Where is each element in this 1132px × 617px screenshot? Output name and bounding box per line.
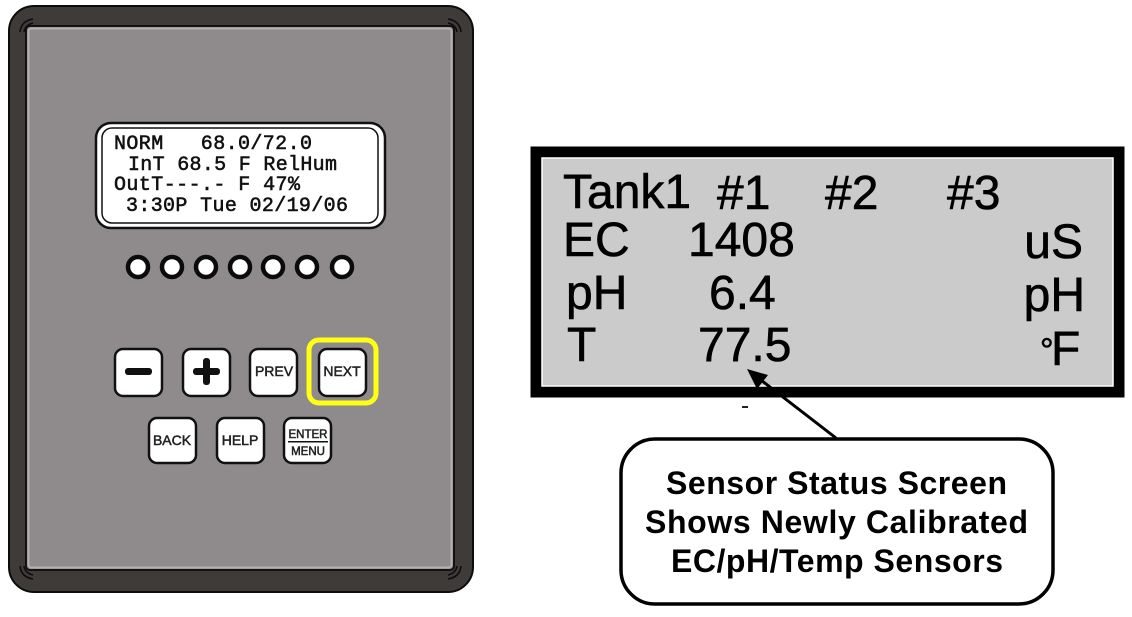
front panel bbox=[26, 26, 454, 570]
LCD display: 3:30P Tue 02/19/06 bbox=[126, 195, 348, 218]
sensor status screen: EC bbox=[563, 214, 630, 267]
callout: EC/pH/Temp Sensors bbox=[671, 543, 1003, 579]
callout bbox=[621, 439, 1053, 604]
LCD display: InT 68.5 F RelHum bbox=[128, 154, 337, 177]
help button bbox=[217, 418, 264, 463]
small dash mark bbox=[742, 406, 748, 408]
arrow to temperature reading bbox=[747, 369, 836, 438]
sensor status screen: Tank1 bbox=[563, 166, 691, 219]
prev button bbox=[250, 349, 297, 396]
panel highlight bbox=[28, 28, 452, 568]
sensor status screen: ° bbox=[1040, 332, 1054, 370]
prev button: PREV bbox=[255, 363, 294, 379]
indicator LEDs bbox=[128, 257, 352, 277]
help button: HELP bbox=[222, 432, 258, 448]
LCD display: NORM 68.0/72.0 bbox=[114, 133, 312, 156]
sensor status screen: 77.5 bbox=[698, 319, 791, 372]
sensor status screen: #1 bbox=[717, 167, 770, 220]
sensor status screen: 6.4 bbox=[709, 267, 776, 320]
plus button bbox=[183, 349, 230, 396]
LCD display: OutT---.- F 47% bbox=[114, 174, 301, 197]
sensor status screen: F bbox=[1051, 323, 1080, 376]
sensor status screen bbox=[536, 152, 1119, 392]
sensor status screen: 1408 bbox=[688, 214, 795, 267]
sensor status screen: T bbox=[567, 319, 596, 372]
next button highlighted bbox=[309, 340, 376, 403]
next button highlighted: NEXT bbox=[323, 363, 361, 379]
sensor status screen: #2 bbox=[825, 167, 878, 220]
LCD display bbox=[96, 123, 385, 228]
enter menu button: MENU bbox=[291, 446, 325, 458]
minus button bbox=[115, 349, 162, 396]
back button: BACK bbox=[153, 432, 192, 448]
back button bbox=[149, 418, 196, 463]
housing corner arcs bbox=[20, 19, 461, 579]
sensor status screen: pH bbox=[1024, 269, 1085, 322]
sensor status screen: uS bbox=[1024, 216, 1083, 269]
callout: Shows Newly Calibrated bbox=[645, 504, 1028, 540]
sensor status screen: pH bbox=[566, 267, 627, 320]
controller device bbox=[9, 6, 473, 592]
sensor status screen: #3 bbox=[947, 167, 1000, 220]
enter menu button bbox=[284, 418, 331, 463]
enter menu button: ENTER bbox=[289, 429, 327, 441]
callout: Sensor Status Screen bbox=[666, 465, 1007, 501]
device housing bbox=[9, 6, 473, 592]
